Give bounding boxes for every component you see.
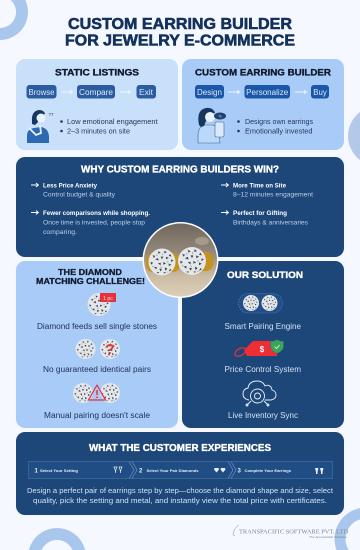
text: experience description: quality, pick the setting and metal, and instantly view the total price with certificates.: [33, 496, 327, 505]
icon: price tag with shield: [234, 340, 284, 358]
icon: woman designing on phone: %: [218, 114, 222, 118]
photo: diamond earrings: [142, 222, 218, 298]
title: FOR JEWELRY E-COMMERCE: [65, 32, 295, 50]
text: no identical pairs: No guaranteed identical pairs: [43, 365, 151, 374]
flow: browse compare exit: [26, 85, 156, 98]
heading: the diamond matching challenge: THE DIAMOND: [58, 267, 122, 277]
benefit: fewer comparisons: Fewer comparisons while shopping.: [43, 210, 150, 217]
text: live inventory sync: Live Inventory Sync: [228, 411, 298, 420]
benefit: perfect for gifting: Birthdays & anniversaries: [233, 220, 308, 226]
flow: design personalize buy: Design: [197, 88, 222, 97]
panel: custom earring builder: [182, 59, 344, 150]
panel: the diamond matching challenge: [16, 261, 178, 428]
icon: confused shopper: [27, 110, 54, 143]
benefit: perfect for gifting: Perfect for Gifting: [233, 210, 287, 217]
panel: static listings: [16, 59, 178, 150]
logo: transpacific software: The Accountable Software: [309, 536, 348, 539]
title: [65, 16, 295, 50]
stepper: three steps: [28, 462, 332, 478]
benefit: more time on site: 8–12 minutes engagement: [233, 192, 313, 198]
benefit: less price anxiety: Less Price Anxiety: [43, 182, 97, 189]
icon: single diamond with 1 pc tag: 1 pc: [103, 296, 113, 302]
icon: woman designing on phone: [198, 108, 226, 143]
step 2: 2: [139, 468, 143, 474]
benefit: more time on site: [221, 182, 313, 198]
benefit: fewer comparisons: comparing.: [43, 229, 77, 236]
benefit: fewer comparisons: Once time is invested, people stop: [43, 220, 146, 226]
benefit: less price anxiety: Control budget & quality: [43, 192, 116, 198]
panel: why custom earring builders win: [16, 157, 344, 257]
flow: browse compare exit: Compare: [79, 88, 113, 97]
text: manual pairing: Manual pairing doesn't scale: [44, 411, 151, 420]
icon: cloud sync: [243, 381, 276, 406]
text: price control system: Price Control System: [224, 365, 301, 374]
flow: design personalize buy: Buy: [313, 88, 327, 97]
icon: diamonds with warning: [73, 383, 120, 403]
text: static bullets: [60, 119, 158, 136]
text: smart pairing engine: Smart Pairing Engine: [224, 322, 302, 331]
text: builder bullets: [237, 119, 314, 136]
decorative ring: top left: [0, 0, 28, 40]
step 3: [238, 468, 324, 474]
step 1: 1: [34, 468, 38, 474]
flow: design personalize buy: Personalize: [246, 88, 288, 97]
step 2: Select Your Pair Diamonds: [146, 469, 198, 473]
logo: transpacific software: TRANSPACIFIC SOFTWARE PVT. LTD: [239, 528, 348, 536]
text: builder bullets: Designs own earrings: [245, 119, 314, 126]
panel: what the customer experiences: [16, 432, 344, 515]
text: static bullets: 2–3 minutes on site: [67, 128, 130, 136]
icon: single diamond with 1 pc tag: [88, 293, 116, 316]
benefit: less price anxiety: [31, 182, 116, 198]
title: CUSTOM EARRING BUILDER: [68, 16, 292, 33]
step 1: Select Your Setting: [40, 469, 79, 473]
heading: the diamond matching challenge: [36, 267, 145, 286]
text: static bullets: Low emotional engagement: [67, 119, 158, 126]
step 1: [34, 467, 122, 474]
heading: custom earring builder: CUSTOM EARRING BUILDER: [195, 68, 331, 78]
heading: why custom earring builders win: WHY CUSTOM EARRING BUILDERS WIN?: [81, 164, 279, 176]
icon: unmatched diamonds: ?: [105, 341, 115, 358]
benefit: fewer comparisons: [31, 210, 150, 236]
logo: transpacific software: [233, 525, 348, 539]
icon: smart pairing diamonds: [238, 294, 282, 313]
benefit: more time on site: More Time on Site: [233, 182, 286, 189]
heading: static listings: STATIC LISTINGS: [55, 68, 139, 78]
decorative ring: bottom right: [335, 508, 360, 550]
heading: the diamond matching challenge: MATCHING CHALLENGE!: [36, 276, 145, 286]
icon: confused shopper: ?7: [48, 112, 54, 117]
decorative circle: right: [348, 112, 360, 160]
icon: unmatched diamonds: [76, 339, 120, 359]
heading: our solution: OUR SOLUTION: [227, 270, 303, 281]
text: experience description: Design a perfect pair of earrings step by step—choose the diamond shape and size, select: [27, 486, 334, 495]
step 2: [139, 468, 226, 474]
step 3: 3: [238, 468, 242, 474]
step 3: Complete Your Earrings: [244, 469, 291, 473]
text: builder bullets: Emotionally invested: [245, 128, 313, 136]
flow: browse compare exit: Exit: [139, 88, 154, 97]
benefit: perfect for gifting: [221, 210, 308, 226]
panel: our solution: [182, 261, 344, 428]
decorative ring: bottom left: [29, 528, 85, 550]
flow: design personalize buy: [195, 85, 329, 98]
icon: price tag with shield: $: [260, 345, 265, 354]
text: diamond feeds: Diamond feeds sell single stones: [37, 322, 157, 331]
flow: browse compare exit: Browse: [28, 88, 54, 97]
heading: what the customer experiences: WHAT THE CUSTOMER EXPERIENCES: [89, 443, 271, 454]
text: experience description: [27, 486, 334, 505]
